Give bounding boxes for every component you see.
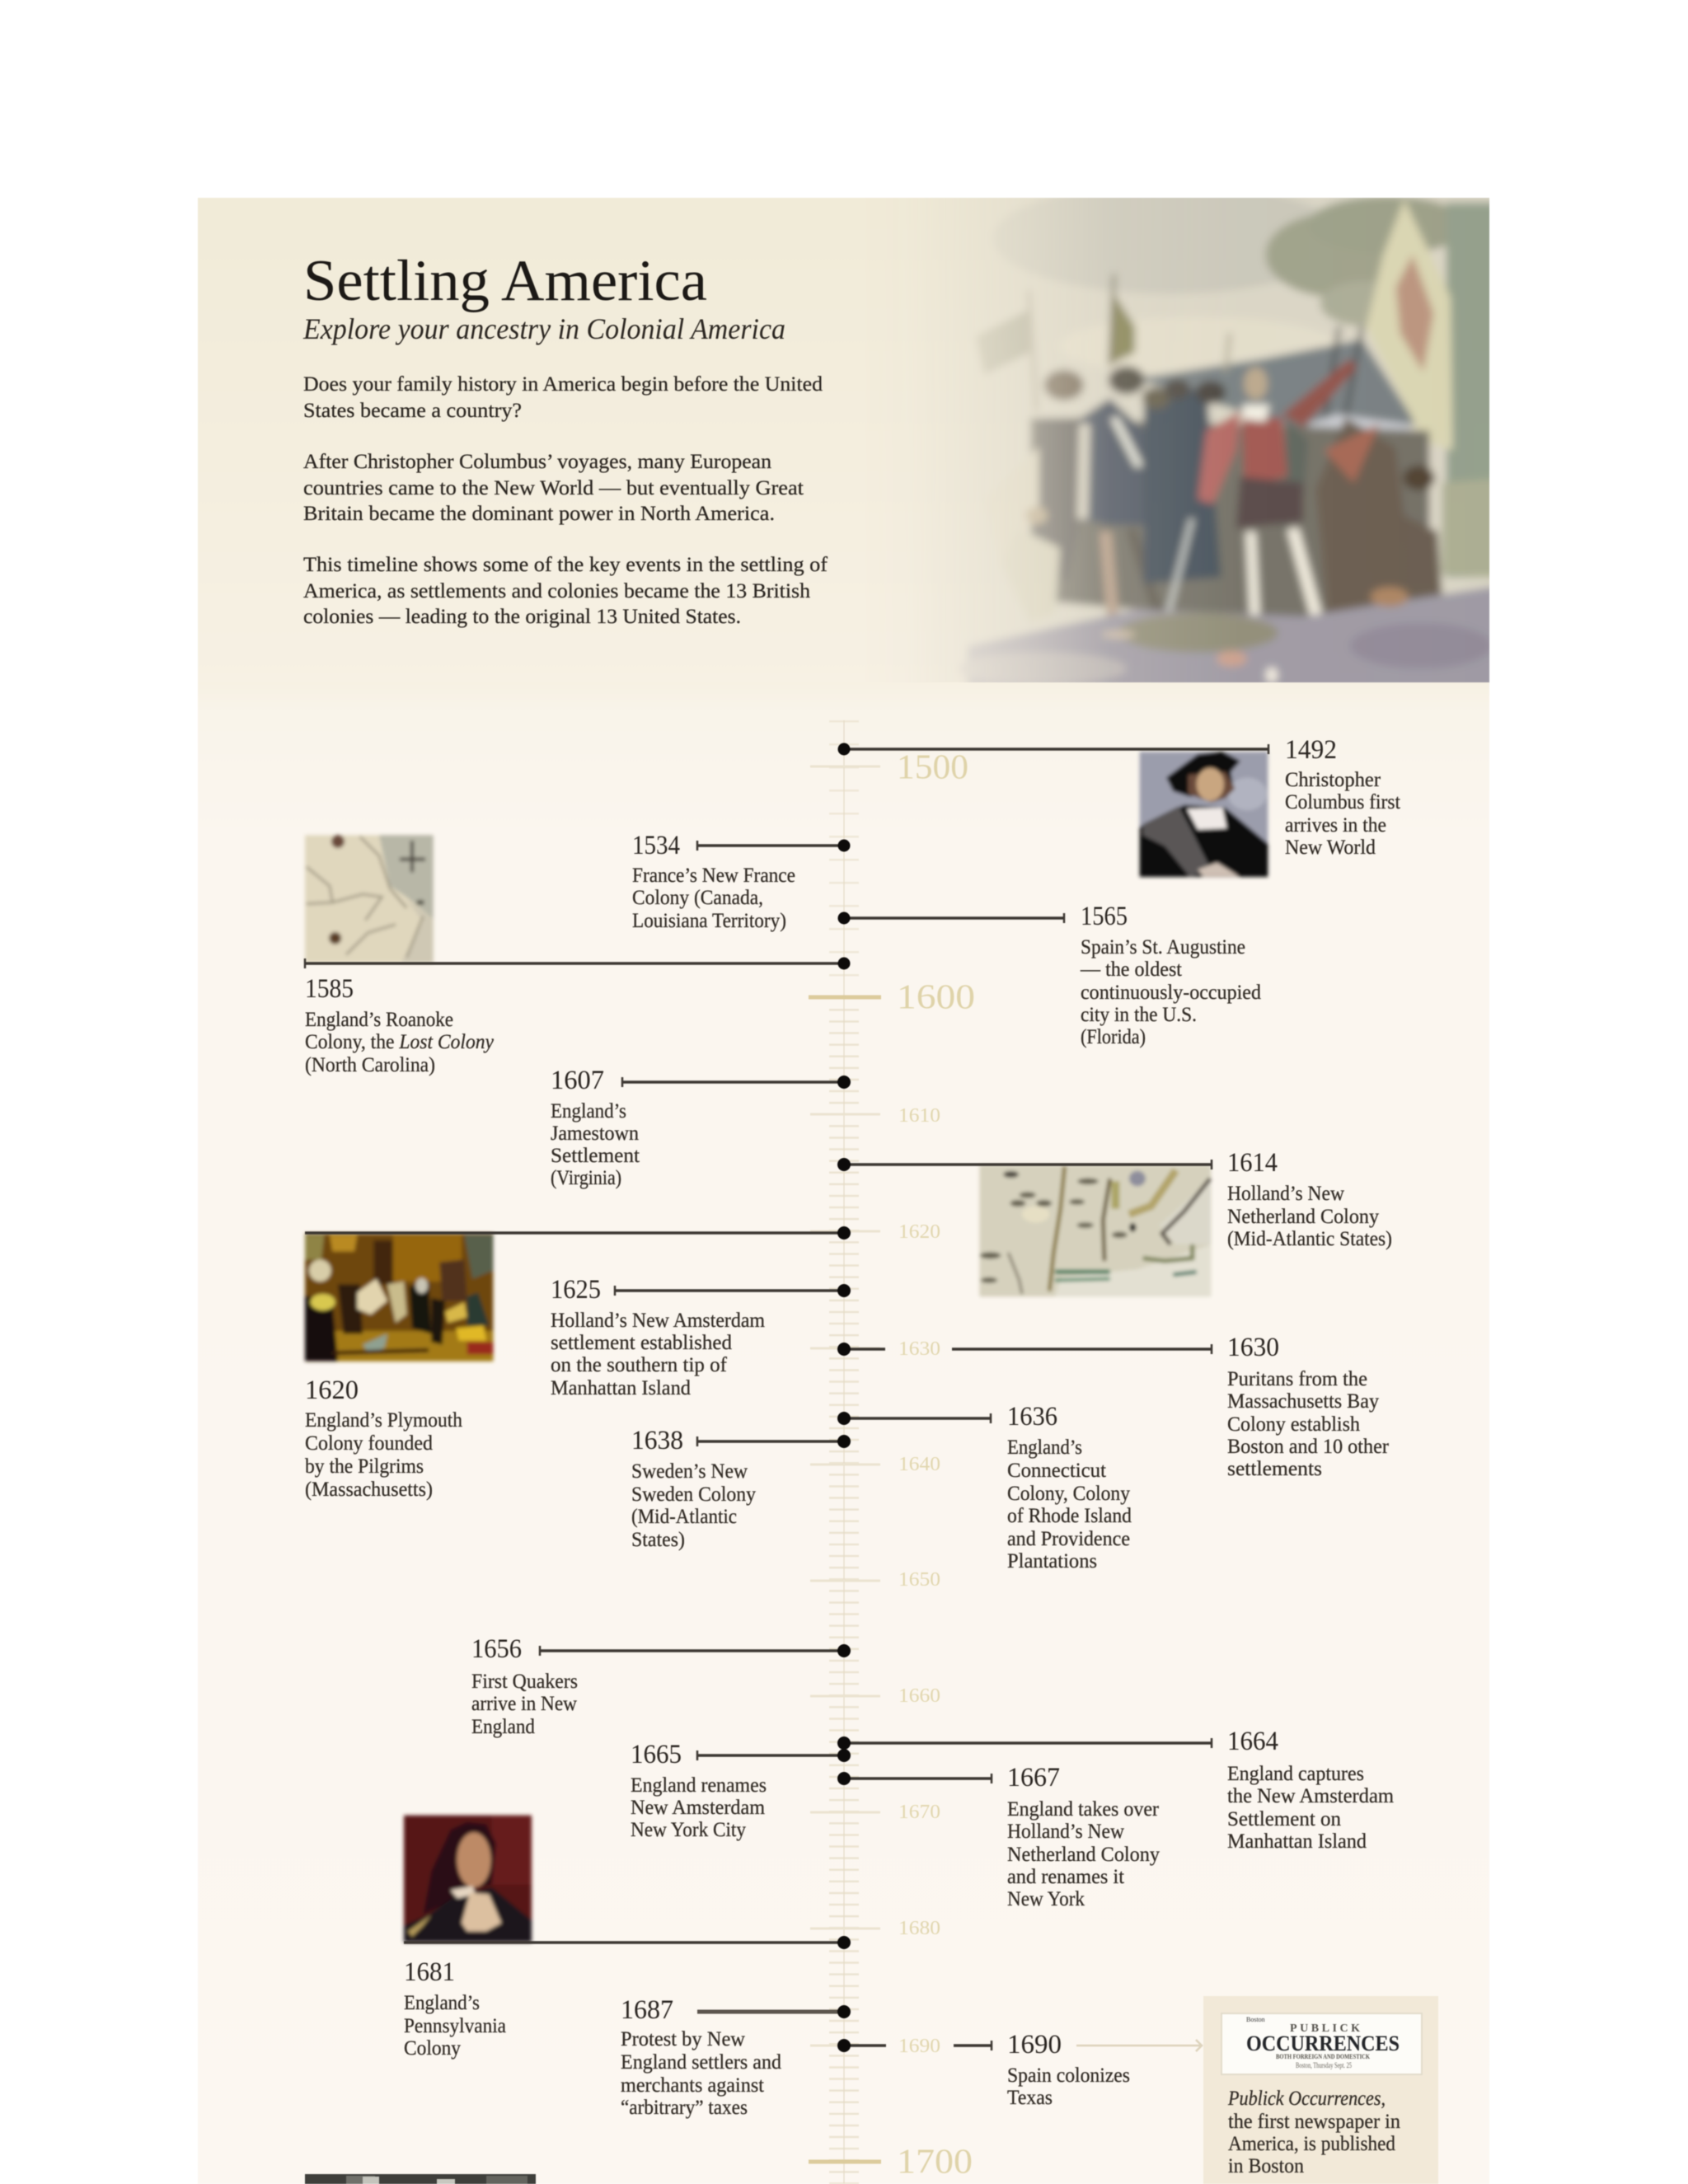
description bbox=[1227, 1183, 1392, 1250]
year: 1492 bbox=[1285, 735, 1337, 765]
description: Publick Occurrences, bbox=[1227, 2088, 1386, 2110]
scale label: 1630: 1630 bbox=[898, 1338, 940, 1360]
description: in Boston bbox=[1228, 2155, 1304, 2177]
image: newspaper masthead: Boston bbox=[1246, 2016, 1265, 2023]
subtitle: Explore your ancestry in Colonial America bbox=[302, 312, 785, 345]
description: (Virginia) bbox=[551, 1167, 621, 1189]
dot bbox=[837, 743, 851, 755]
description: New York City bbox=[631, 1819, 746, 1841]
description bbox=[404, 1992, 506, 2060]
description: Jamestown bbox=[551, 1122, 639, 1145]
description bbox=[632, 865, 795, 932]
description bbox=[1285, 769, 1400, 859]
scale label: 1600: 1600 bbox=[897, 979, 975, 1017]
description: England’s bbox=[404, 1992, 480, 2014]
year: 1687 bbox=[621, 1995, 673, 2025]
event: 1681 Pennsylvania bbox=[404, 1816, 851, 2060]
year: 1585 bbox=[305, 974, 354, 1004]
description: Protest by New bbox=[621, 2028, 745, 2050]
image: map of Roanoke bbox=[305, 835, 434, 963]
description: Boston and 10 other bbox=[1227, 1436, 1390, 1458]
description bbox=[1227, 1368, 1390, 1480]
year: 1620 bbox=[305, 1376, 359, 1405]
image: newspaper masthead: PUBLICK bbox=[1290, 2022, 1360, 2035]
description: States) bbox=[631, 1529, 685, 1551]
description: Plantations bbox=[1007, 1550, 1097, 1572]
description: England’s Plymouth bbox=[305, 1409, 462, 1432]
description: (Florida) bbox=[1081, 1026, 1146, 1048]
scale label: 1620: 1620 bbox=[898, 1221, 940, 1243]
description: Massachusetts Bay bbox=[1227, 1390, 1379, 1413]
description: “arbitrary” taxes bbox=[621, 2097, 748, 2119]
description: settlement established bbox=[551, 1332, 732, 1354]
description: Christopher bbox=[1285, 769, 1381, 791]
event: 1665 bbox=[631, 1740, 851, 1841]
text block: introduction: This timeline shows some of the key events in the settling of bbox=[303, 554, 828, 576]
description: Pennsylvania bbox=[404, 2015, 506, 2037]
description: Settlement bbox=[551, 1145, 640, 1167]
description: continuously-occupied bbox=[1081, 982, 1261, 1004]
description: and Providence bbox=[1007, 1528, 1130, 1550]
description: city in the U.S. bbox=[1081, 1004, 1197, 1026]
description bbox=[551, 1100, 640, 1189]
description: (Mid-Atlantic bbox=[631, 1506, 737, 1528]
event: 1565 bbox=[837, 902, 1261, 1048]
image: newspaper masthead bbox=[1221, 2013, 1422, 2074]
description: First Quakers bbox=[471, 1671, 578, 1693]
scale label: 1700: 1700 bbox=[897, 2143, 973, 2181]
description: England bbox=[471, 1716, 535, 1738]
image: map of New Netherland bbox=[979, 1165, 1211, 1296]
text block: introduction: Does your family history in America begin before the United bbox=[303, 373, 823, 396]
scale label: 1500: 1500 bbox=[897, 748, 968, 786]
description: Colony founded bbox=[305, 1432, 433, 1455]
description: Colony, Colony bbox=[1007, 1483, 1130, 1505]
description bbox=[631, 1774, 767, 1841]
description bbox=[621, 2028, 781, 2119]
event: 1630 bbox=[837, 1333, 1390, 1480]
event: 1667 bbox=[837, 1763, 1160, 1910]
description: (North Carolina) bbox=[305, 1054, 435, 1076]
description: Manhattan Island bbox=[551, 1377, 691, 1399]
event: 1636 bbox=[837, 1402, 1132, 1572]
description: New Amsterdam bbox=[631, 1797, 766, 1819]
description: Colony bbox=[404, 2037, 461, 2060]
text block: introduction: States became a country? bbox=[303, 400, 522, 422]
panel: Publick Occurrences callout bbox=[1203, 1996, 1438, 2184]
description bbox=[1080, 936, 1261, 1048]
image: landing of Columbus painting bbox=[956, 198, 1490, 682]
panel: header bbox=[198, 198, 1490, 682]
event: 1625 bbox=[551, 1275, 851, 1399]
event: 1492 Columbus bbox=[837, 735, 1400, 877]
description: on the southern tip of bbox=[551, 1354, 728, 1376]
year: 1667 bbox=[1007, 1763, 1060, 1793]
description bbox=[1007, 1798, 1160, 1910]
description: Puritans from the bbox=[1227, 1368, 1367, 1390]
event: 1614 New Netherland bbox=[837, 1148, 1392, 1296]
description bbox=[471, 1671, 578, 1738]
scale label: 1680: 1680 bbox=[898, 1918, 940, 1939]
description: Columbus first bbox=[1285, 791, 1400, 813]
event: 1607 bbox=[551, 1066, 851, 1189]
description bbox=[1227, 1763, 1395, 1853]
description bbox=[631, 1460, 756, 1551]
year: 1534 bbox=[632, 831, 680, 860]
scale label: 1690: 1690 bbox=[898, 2036, 940, 2057]
scale label: 1610: 1610 bbox=[898, 1105, 940, 1127]
text block: introduction: After Christopher Columbus’ voyages, many European bbox=[303, 451, 772, 473]
description: Connecticut bbox=[1007, 1460, 1106, 1482]
text block: introduction bbox=[303, 373, 828, 628]
description: England takes over bbox=[1007, 1798, 1160, 1821]
description bbox=[1227, 2088, 1400, 2177]
year: 1656 bbox=[471, 1634, 522, 1664]
description: the first newspaper in bbox=[1228, 2111, 1400, 2133]
description: Netherland Colony bbox=[1007, 1844, 1160, 1866]
description: Holland’s New bbox=[1007, 1821, 1124, 1843]
scale label: 1650: 1650 bbox=[898, 1569, 940, 1591]
scale label: 1640: 1640 bbox=[898, 1454, 940, 1475]
description: England renames bbox=[631, 1774, 767, 1797]
description bbox=[305, 1009, 495, 1076]
year: 1636 bbox=[1007, 1402, 1057, 1432]
year: 1681 bbox=[404, 1957, 455, 1987]
text block: introduction: America, as settlements and colonies became the 13 British bbox=[303, 580, 811, 602]
description: France’s New France bbox=[632, 865, 795, 887]
image: portrait of William Penn bbox=[404, 1816, 532, 1943]
event: 1656 bbox=[471, 1634, 851, 1738]
event: 1687 bbox=[621, 1995, 851, 2119]
description: Netherland Colony bbox=[1227, 1206, 1379, 1228]
event: 1620 Plymouth bbox=[305, 1226, 851, 1501]
description: America, is published bbox=[1228, 2133, 1395, 2155]
description: Manhattan Island bbox=[1227, 1830, 1367, 1853]
image: newspaper masthead: Boston, Thursday Sept. 25 bbox=[1296, 2061, 1352, 2069]
description: New York bbox=[1007, 1888, 1085, 1910]
description: by the Pilgrims bbox=[305, 1455, 424, 1478]
description bbox=[551, 1310, 766, 1399]
description bbox=[305, 1409, 462, 1501]
event: 1638 bbox=[631, 1426, 851, 1551]
description bbox=[1007, 1436, 1132, 1572]
description bbox=[1007, 2064, 1130, 2109]
year: 1565 bbox=[1081, 902, 1128, 931]
event: 1534 bbox=[632, 831, 851, 932]
event: 1585 Roanoke bbox=[305, 835, 850, 1076]
description: (Mid-Atlantic States) bbox=[1227, 1228, 1392, 1250]
connector line bbox=[844, 748, 1268, 751]
scale label: 1670: 1670 bbox=[898, 1802, 940, 1823]
description: of Rhode Island bbox=[1007, 1505, 1132, 1527]
text block: introduction: Britain became the dominant power in North America. bbox=[303, 503, 775, 525]
description: England captures bbox=[1227, 1763, 1364, 1785]
year: 1630 bbox=[1227, 1333, 1279, 1362]
panel: paper timeline background bbox=[198, 682, 1489, 2184]
image: Pilgrims painting bbox=[305, 1234, 493, 1361]
description: Settlement on bbox=[1227, 1808, 1341, 1830]
image: next event photograph (cropped at page edge) bbox=[305, 2174, 536, 2184]
event: 1690 Texas bbox=[837, 2030, 1130, 2109]
description: — the oldest bbox=[1080, 958, 1182, 981]
image: portrait of Columbus bbox=[1140, 752, 1268, 877]
description: England settlers and bbox=[621, 2051, 781, 2074]
description: Colony establish bbox=[1227, 1413, 1360, 1436]
description: settlements bbox=[1227, 1458, 1322, 1480]
year: 1614 bbox=[1227, 1148, 1278, 1178]
description: merchants against bbox=[621, 2074, 764, 2097]
description: Sweden Colony bbox=[631, 1483, 756, 1506]
image: newspaper masthead: OCCURRENCES bbox=[1246, 2032, 1400, 2055]
description: arrives in the bbox=[1285, 814, 1386, 837]
timeline axis and scale bbox=[809, 720, 975, 2184]
text block: introduction: countries came to the New World — but eventually Great bbox=[303, 477, 804, 499]
description: Holland’s New Amsterdam bbox=[551, 1310, 766, 1332]
arrow: 1690 to newspaper callout bbox=[1076, 2040, 1202, 2051]
text block: introduction: colonies — leading to the original 13 United States. bbox=[303, 606, 741, 628]
year: 1664 bbox=[1227, 1727, 1278, 1756]
year: 1607 bbox=[551, 1066, 604, 1095]
year: 1665 bbox=[631, 1740, 682, 1769]
description: Holland’s New bbox=[1227, 1183, 1344, 1205]
description: England’s Roanoke bbox=[305, 1009, 453, 1031]
event: 1664 bbox=[837, 1727, 1395, 1853]
year: 1625 bbox=[551, 1275, 601, 1305]
description: the New Amsterdam bbox=[1227, 1785, 1395, 1807]
description: New World bbox=[1285, 837, 1376, 859]
description: England’s bbox=[1007, 1436, 1082, 1459]
description: Colony (Canada, bbox=[632, 887, 763, 909]
description: Sweden’s New bbox=[631, 1460, 748, 1483]
image: newspaper masthead: BOTH FORREIGN AND DOMESTICK bbox=[1276, 2053, 1371, 2060]
description: Louisiana Territory) bbox=[632, 910, 786, 932]
description: arrive in New bbox=[471, 1693, 577, 1715]
description: (Massachusetts) bbox=[305, 1479, 433, 1501]
title: Settling America bbox=[303, 249, 707, 313]
description: Spain’s St. Augustine bbox=[1081, 936, 1245, 958]
description: Colony, the Lost Colony bbox=[305, 1031, 495, 1053]
description: Spain colonizes bbox=[1007, 2064, 1130, 2087]
year: 1690 bbox=[1007, 2030, 1062, 2060]
scale label: 1660: 1660 bbox=[898, 1685, 940, 1707]
year: 1638 bbox=[631, 1426, 683, 1455]
description: and renames it bbox=[1007, 1866, 1124, 1888]
description: England’s bbox=[551, 1100, 626, 1122]
description: Texas bbox=[1007, 2087, 1053, 2109]
